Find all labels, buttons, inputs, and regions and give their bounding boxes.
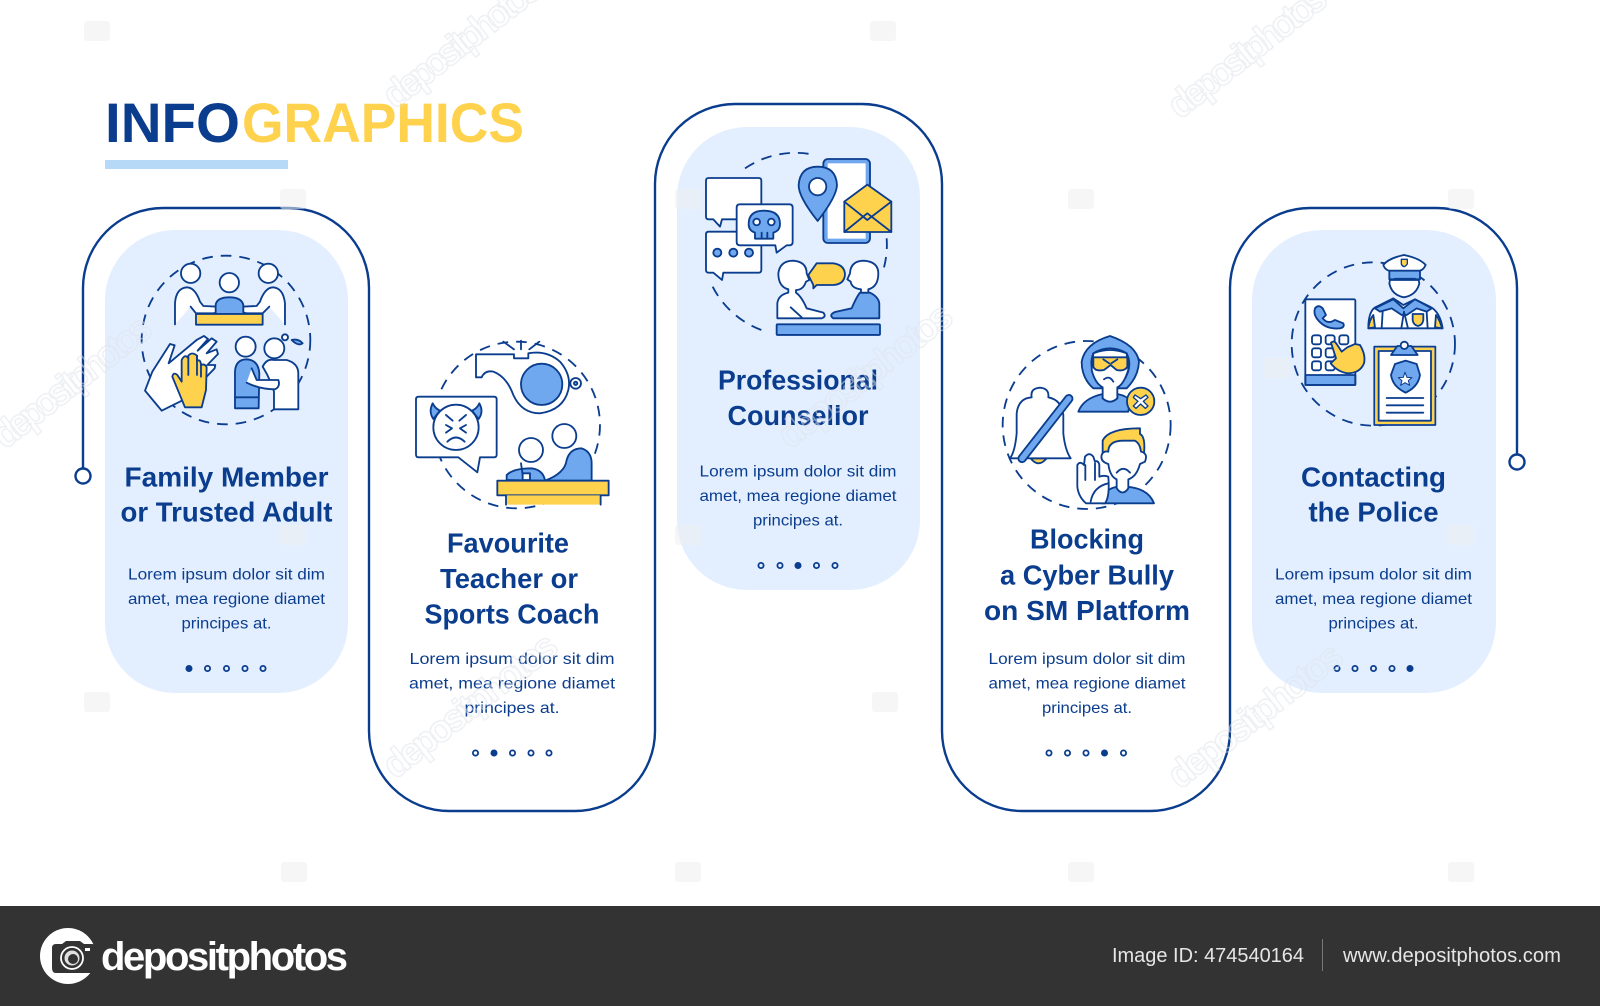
body text: principes at. xyxy=(1042,700,1132,717)
body text xyxy=(988,651,1186,717)
panel background xyxy=(105,230,348,693)
body text: Lorem ipsum dolor sit dim xyxy=(700,464,896,480)
logo wordmark: depositphotos xyxy=(101,935,348,979)
body text: Lorem ipsum dolor sit dim xyxy=(410,651,614,668)
watermark: depositphotos xyxy=(375,625,566,787)
heading: Professional xyxy=(718,364,878,396)
timeline outline connecting the steps xyxy=(76,104,1524,811)
body text: amet, mea regione diamet xyxy=(409,676,616,692)
heading: a Cyber Bully xyxy=(1000,560,1174,590)
heading: Sports Coach xyxy=(424,598,600,630)
icon: chat, location, mail and counselling xyxy=(706,153,891,335)
icon: family and support xyxy=(142,256,310,424)
body text xyxy=(1275,566,1473,632)
body text: amet, mea regione diamet xyxy=(128,591,326,608)
heading xyxy=(984,524,1190,626)
panel background xyxy=(677,127,920,590)
body text xyxy=(128,566,326,632)
heading: Family Member xyxy=(124,462,329,492)
title: INFO xyxy=(105,91,240,154)
footer bar xyxy=(0,906,1600,1006)
body text: principes at. xyxy=(464,700,560,717)
body text: principes at. xyxy=(1328,616,1418,632)
body text: principes at. xyxy=(182,616,272,632)
panel: favourite teacher xyxy=(409,341,616,756)
pagination dots xyxy=(1046,750,1126,756)
heading xyxy=(1301,462,1446,528)
pagination dots xyxy=(1334,666,1413,671)
body text: amet, mea regione diamet xyxy=(1275,591,1473,608)
heading: Blocking xyxy=(1030,524,1144,554)
heading: or Trusted Adult xyxy=(120,496,332,528)
body text: Lorem ipsum dolor sit dim xyxy=(128,566,325,584)
body text: principes at. xyxy=(753,512,843,530)
body text: Lorem ipsum dolor sit dim xyxy=(1275,566,1472,584)
image id: Image ID: 474540164 xyxy=(1112,945,1304,967)
pagination dots xyxy=(758,563,838,568)
body text: amet, mea regione diamet xyxy=(988,676,1186,692)
heading: Contacting xyxy=(1301,462,1446,492)
icon: phone, police officer and report xyxy=(1292,255,1455,426)
heading: Favourite xyxy=(447,528,569,558)
body text: Lorem ipsum dolor sit dim xyxy=(988,651,1186,668)
heading: Counsellor xyxy=(728,400,869,431)
panel: family member xyxy=(105,230,348,693)
title: GRAPHICS xyxy=(242,91,524,154)
body text xyxy=(409,651,616,717)
heading: Teacher or xyxy=(440,563,578,594)
watermark: depositphotos xyxy=(1160,635,1351,797)
heading xyxy=(120,462,332,528)
heading xyxy=(718,364,878,431)
body text xyxy=(700,464,897,530)
heading: on SM Platform xyxy=(984,595,1190,626)
heading: the Police xyxy=(1308,496,1438,528)
panel background xyxy=(1252,230,1496,693)
icon: whistle, angry face and desk xyxy=(416,341,609,508)
heading xyxy=(424,528,600,630)
website: www.depositphotos.com xyxy=(1342,945,1561,967)
panel: contacting the police xyxy=(1252,230,1496,693)
body text: amet, mea regione diamet xyxy=(700,488,897,505)
panel: professional counsellor xyxy=(677,127,920,590)
watermark: depositphotos xyxy=(770,295,961,457)
panel: blocking a cyber bully xyxy=(984,336,1190,756)
pagination dots xyxy=(186,666,266,671)
title xyxy=(105,91,524,154)
title underline xyxy=(105,160,288,169)
icon: camera logo xyxy=(40,928,96,984)
pagination dots xyxy=(473,750,552,756)
icon: muted bell, hooded bully and stop hand xyxy=(1003,336,1171,509)
